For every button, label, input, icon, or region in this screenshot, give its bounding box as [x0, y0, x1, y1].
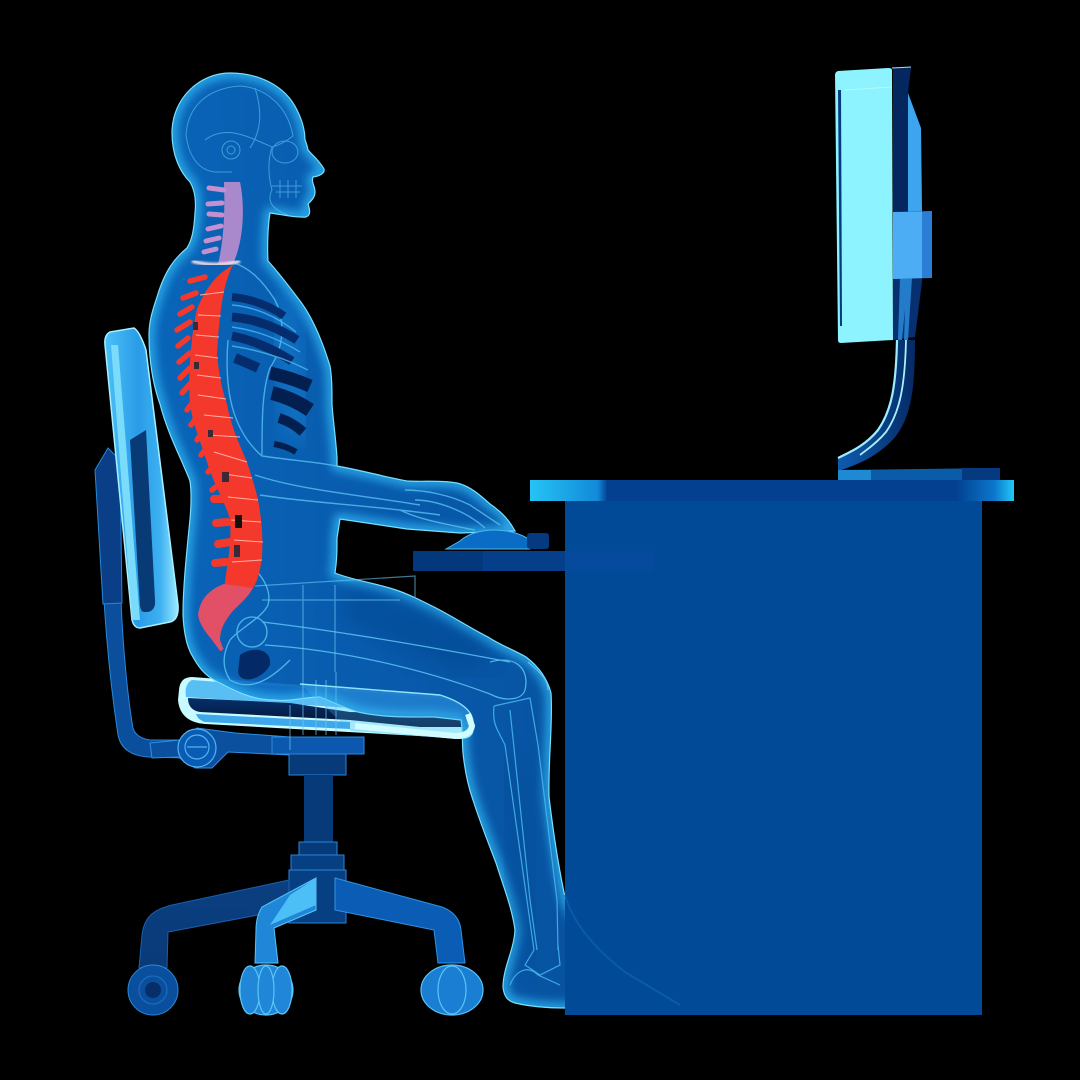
coccyx — [207, 630, 222, 650]
gas lift column — [289, 754, 346, 923]
spinous processes — [177, 277, 222, 490]
upper arm and torso contour — [227, 262, 500, 530]
desk — [530, 468, 1014, 1015]
desk body — [565, 501, 982, 1015]
seat base plate — [272, 737, 364, 754]
backrest — [105, 328, 178, 628]
chair — [95, 328, 483, 1015]
seat underside band — [196, 714, 350, 729]
skull — [186, 86, 302, 215]
seat mechanism arm — [150, 728, 290, 768]
human figure — [148, 72, 565, 1009]
cervical spine — [204, 182, 243, 264]
thoracic and lumbar spine — [177, 265, 263, 650]
monitor screen — [835, 68, 893, 343]
monitor base — [838, 468, 1000, 480]
monitor mount box — [893, 211, 932, 279]
chair column seen through body — [255, 576, 415, 750]
seat slot — [188, 698, 466, 727]
vertebra shadows — [193, 322, 242, 557]
seat front edge highlight — [355, 714, 472, 736]
pelvis opening — [238, 650, 270, 679]
keyboard tray — [413, 551, 653, 571]
chair back post — [104, 600, 185, 758]
body inner glow — [150, 74, 565, 1008]
body outline — [149, 73, 678, 1010]
illustration: x-ray figure seated at a desk — [94, 66, 1014, 1016]
seat cushion — [178, 677, 473, 738]
caster: middle — [239, 965, 293, 1015]
mouse and keyboard — [446, 530, 549, 549]
sacrum — [198, 584, 253, 650]
caster: right — [421, 965, 483, 1015]
foot seen through desk — [565, 895, 680, 1005]
pelvis and femur — [224, 565, 548, 699]
lower leg bones — [494, 698, 560, 985]
backrest bracket — [95, 448, 122, 604]
chair leg: right — [335, 878, 465, 963]
chair leg: front — [255, 878, 316, 963]
chair leg: rear — [139, 880, 289, 968]
body silhouette — [149, 73, 678, 1010]
monitor back wedge — [893, 67, 922, 340]
seat seen through body — [300, 684, 473, 738]
monitor neck — [838, 340, 915, 471]
vertebra lines — [195, 292, 263, 562]
desk top — [530, 480, 1014, 501]
ribcage — [232, 297, 310, 452]
shoulder highlight — [192, 261, 240, 264]
monitor — [835, 67, 932, 471]
caster: left — [128, 965, 178, 1015]
seat adjustment knob — [178, 729, 216, 767]
